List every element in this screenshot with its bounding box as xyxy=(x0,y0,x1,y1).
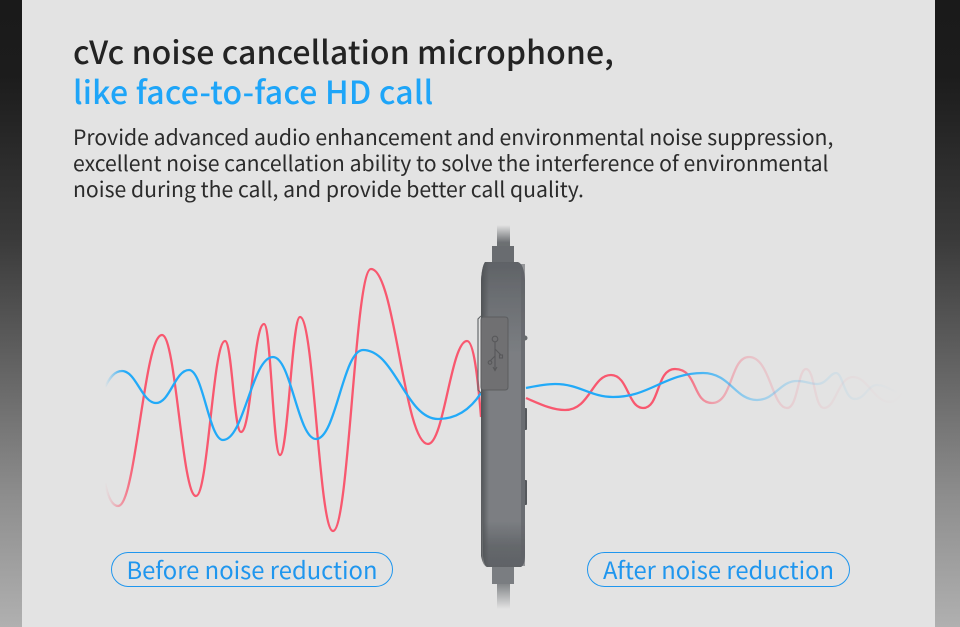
bottom collar xyxy=(492,566,514,584)
description text: Provide advanced audio enhancement and environmental noise suppression, xyxy=(73,121,833,152)
control body xyxy=(481,262,525,567)
inline control device xyxy=(478,225,528,609)
bottom cable xyxy=(497,582,510,609)
description text: noise during the call, and provide better call quality. xyxy=(73,173,584,204)
icon: usb symbol xyxy=(488,336,502,370)
right side buttons xyxy=(522,336,528,505)
usb flap xyxy=(481,317,508,390)
right side bar xyxy=(935,0,960,627)
wave: blue after noise reduction xyxy=(526,373,897,400)
top collar xyxy=(492,246,514,262)
top cable xyxy=(497,225,510,247)
description text: excellent noise cancellation ability to solve the interference of environmental xyxy=(73,147,829,178)
title line 1: cVc noise cancellation microphone, xyxy=(73,28,614,74)
label: after noise reduction: After noise reduction xyxy=(603,551,834,586)
title xyxy=(73,28,614,114)
wave: red before noise reduction xyxy=(105,269,481,531)
description text xyxy=(73,121,833,204)
wave: blue before noise reduction xyxy=(105,350,481,440)
left side bar xyxy=(0,0,22,627)
label: before noise reduction: Before noise reduction xyxy=(126,551,378,586)
wave: red after noise reduction xyxy=(526,357,905,410)
title line 2: like face-to-face HD call xyxy=(73,68,433,114)
